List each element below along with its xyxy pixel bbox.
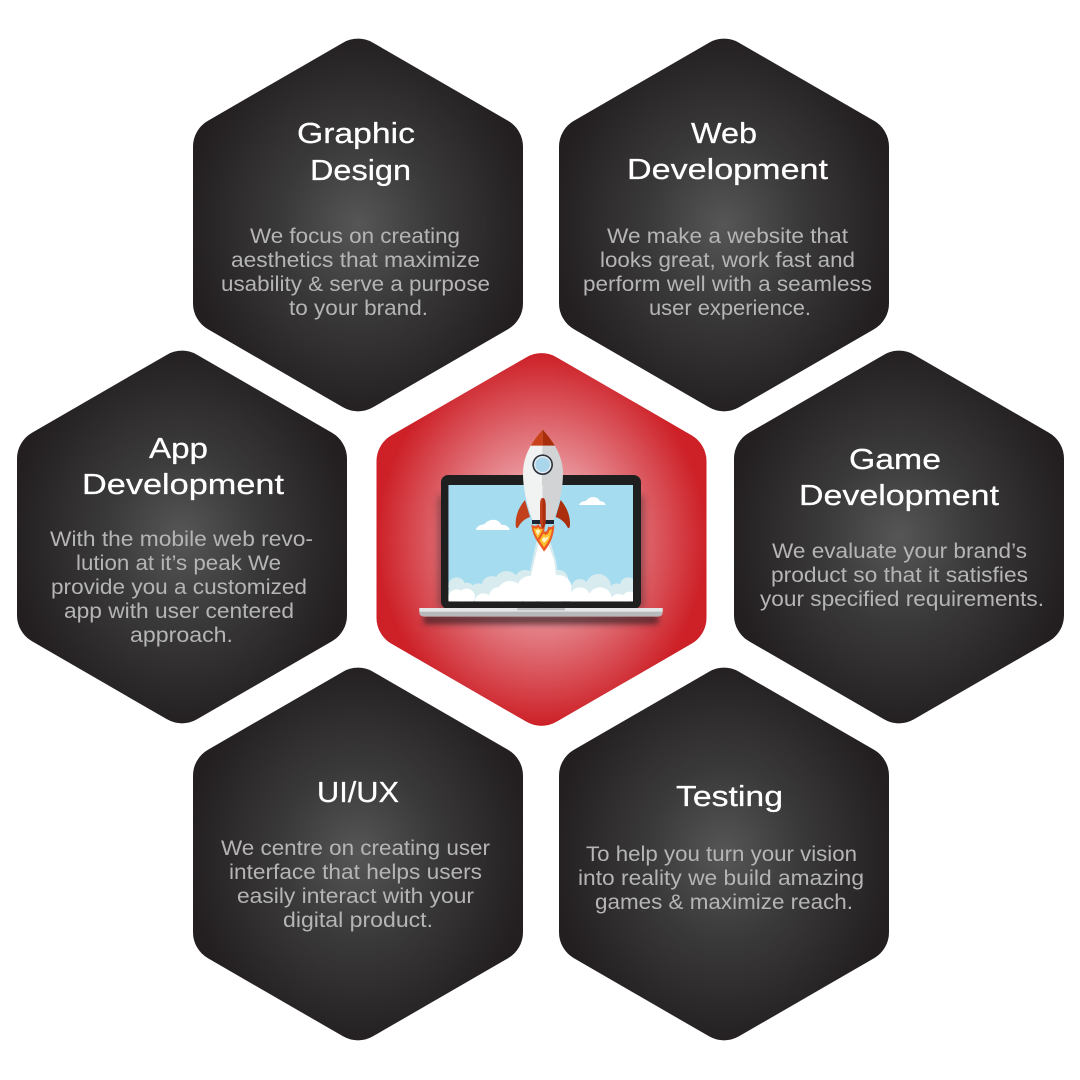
hexagon: UI/UX: [193, 668, 523, 1040]
hexagon: Game Development: [734, 351, 1064, 723]
text: UI/UX description: interface that helps users: [229, 861, 482, 884]
screen sky with clouds: [448, 485, 638, 611]
text: App Development description: approach.: [130, 624, 233, 647]
text: App Development description: app with user centered: [64, 600, 294, 623]
hexagon: Web Development: [559, 39, 889, 411]
heading: UI/UX: UI/UX: [317, 777, 399, 809]
heading: Web Development: Web: [691, 118, 757, 150]
heading: Graphic Design: [297, 118, 415, 187]
nose cone: [530, 430, 555, 446]
text: Graphic Design description: [221, 225, 490, 320]
body: [523, 429, 543, 520]
text: Testing description: games & maximize reach.: [595, 891, 853, 914]
engine band: [532, 520, 554, 524]
laptop base: [419, 608, 663, 617]
text: UI/UX description: easily interact with your: [237, 885, 474, 908]
hexagon: App Development: [17, 351, 347, 723]
sky clouds: [476, 497, 606, 530]
text: App Development description: provide you a customized: [51, 576, 307, 599]
text: UI/UX description: [221, 837, 490, 932]
text: Game Development description: [760, 540, 1044, 611]
porthole: [532, 454, 553, 475]
centre fin: [540, 498, 546, 529]
heading: Game Development: Game: [849, 444, 941, 476]
hexagon: Graphic Design: [193, 39, 523, 411]
front clouds: [448, 575, 633, 602]
heading: App Development: App: [149, 433, 208, 465]
text: UI/UX description: digital product.: [283, 909, 433, 932]
text: Web Development description: We make a website that: [607, 225, 848, 248]
back clouds: [448, 570, 637, 601]
text: Game Development description: your specified requirements.: [760, 588, 1044, 611]
text: Graphic Design description: usability & serve a purpose: [221, 273, 490, 296]
text: App Development description: lution at it’s peak We: [76, 552, 281, 575]
rocket: [516, 429, 570, 552]
text: Testing description: [578, 843, 864, 914]
heading: Web Development: [627, 118, 828, 186]
hexagon: central red panel: [376, 353, 706, 726]
text: UI/UX description: We centre on creating user: [221, 837, 490, 860]
flames: [531, 524, 545, 542]
heading: App Development: [82, 433, 284, 501]
text: App Development description: [50, 528, 313, 647]
text: Game Development description: product so that it satisfies: [771, 564, 1028, 587]
heading: Game Development: Development: [799, 480, 999, 512]
text: Web Development description: perform well with a seamless: [583, 273, 872, 296]
text: App Development description: With the mobile web revo-: [50, 528, 313, 551]
text: Game Development description: We evaluate your brand’s: [772, 540, 1027, 563]
text: Testing description: into reality we build amazing: [578, 867, 864, 890]
hexagon: Testing: [559, 668, 889, 1040]
text: Graphic Design description: to your brand.: [289, 297, 428, 320]
laptop shadows: [423, 495, 659, 624]
text: Graphic Design description: aesthetics that maximize: [231, 249, 480, 272]
heading: Graphic Design: Graphic: [297, 118, 415, 150]
text: Web Development description: looks great, work fast and: [600, 249, 855, 272]
heading: Testing: Testing: [676, 781, 783, 813]
text: Testing description: To help you turn your vision: [586, 843, 857, 866]
heading: Graphic Design: Design: [310, 155, 411, 187]
rocket exhaust: [530, 542, 558, 572]
laptop screen bezel: [441, 475, 641, 609]
heading: App Development: Development: [82, 469, 284, 501]
heading: Game Development: [799, 444, 999, 512]
text: Web Development description: [583, 225, 872, 320]
icon: laptop with rocket launch: [419, 429, 663, 624]
side fins: [516, 500, 530, 528]
text: Graphic Design description: We focus on creating: [250, 225, 460, 248]
heading: Web Development: Development: [627, 154, 828, 186]
text: Web Development description: user experience.: [649, 297, 811, 320]
